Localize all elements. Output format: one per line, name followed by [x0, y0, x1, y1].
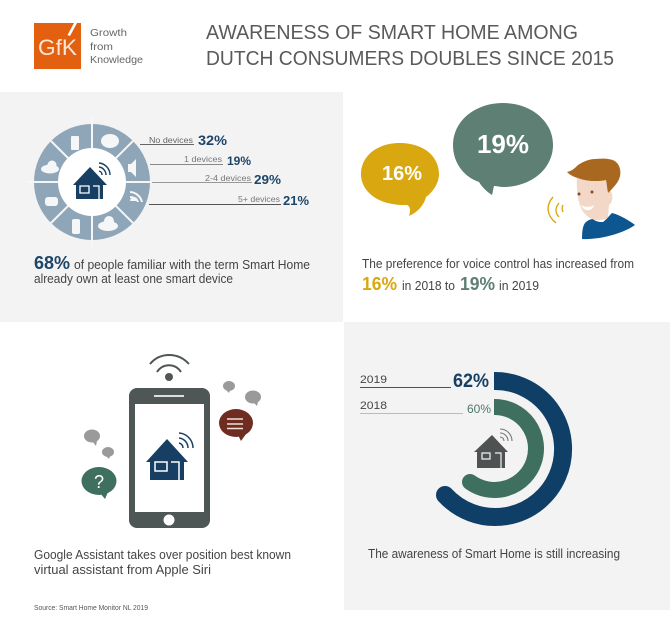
legend: device counts: 21% — [283, 194, 309, 208]
ring labels: 62% — [453, 371, 489, 392]
legend: device counts: 5+ devices — [238, 194, 280, 204]
text: Google Assistant: virtual assistant from Apple Siri — [34, 563, 211, 577]
source: Source: Smart Home Monitor NL 2019 — [34, 605, 148, 612]
title: AWARENESS OF SMART HOME AMONG — [206, 21, 578, 44]
speech bubble 16 percent: 16% — [382, 163, 422, 185]
logo: GfK: GfK — [38, 35, 77, 60]
panel: virtual assistant — [34, 355, 291, 612]
panel: background top left — [0, 92, 343, 322]
wheel of smart devices — [27, 117, 157, 248]
legend: device counts: 19% — [227, 154, 251, 168]
house icon on screen — [146, 433, 193, 480]
house icon centre — [474, 429, 512, 468]
legend: device counts: 32% — [198, 132, 228, 148]
text: awareness increasing: The awareness of Smart Home is still increasing — [368, 547, 620, 561]
wifi signal — [150, 355, 189, 381]
house icon — [73, 163, 110, 199]
logo: GfK: Growth — [90, 27, 127, 39]
chat bubbles right — [219, 381, 261, 441]
logo: GfK: Knowledge — [90, 54, 143, 66]
title — [206, 21, 614, 70]
person speaking — [567, 159, 635, 239]
title: DUTCH CONSUMERS DOUBLES SINCE 2015 — [206, 47, 614, 70]
legend: device counts: 1 devices — [184, 154, 222, 164]
panel: voice control — [361, 103, 635, 294]
legend: device counts: No devices — [149, 135, 193, 145]
text: Google Assistant: Google Assistant takes over position best known — [34, 548, 291, 562]
sound waves — [548, 197, 563, 223]
text: voice control preference: in 2018 to — [402, 279, 455, 293]
ring labels: 2018 — [360, 400, 387, 412]
speech bubble 16 percent — [361, 143, 439, 216]
text: Google Assistant — [34, 548, 291, 577]
logo: GfK — [34, 23, 143, 69]
legend: device counts: 29% — [254, 172, 281, 187]
text: voice control preference: The preference for voice control has increased from — [362, 257, 634, 271]
legend: device counts: 2-4 devices — [205, 173, 251, 183]
panel: device ownership — [27, 117, 310, 286]
chat bubbles left — [82, 430, 116, 499]
ring labels: 60% — [467, 402, 491, 416]
text: voice control preference: 16% — [362, 274, 397, 294]
chat bubbles left: ? — [94, 472, 104, 492]
legend: device counts — [140, 132, 309, 208]
text: 68 percent own a device: 68% — [34, 253, 70, 273]
text: voice control preference: in 2019 — [499, 279, 539, 293]
text: voice control preference — [362, 257, 634, 294]
speech bubble 19 percent: 19% — [477, 129, 529, 159]
logo: GfK: from — [90, 41, 113, 53]
speech bubble 19 percent — [453, 103, 553, 195]
ring labels — [360, 371, 491, 416]
text: 68 percent own a device — [34, 253, 310, 286]
ring chart — [436, 381, 563, 517]
text: voice control preference: 19% — [460, 274, 495, 294]
text: 68 percent own a device: of people familiar with the term Smart Home — [74, 258, 310, 272]
panel: awareness — [360, 371, 620, 561]
ring labels: 2019 — [360, 374, 387, 386]
text: 68 percent own a device: already own at least one smart device — [34, 272, 233, 286]
smartphone — [129, 388, 210, 528]
panel: background bottom right — [344, 322, 670, 610]
